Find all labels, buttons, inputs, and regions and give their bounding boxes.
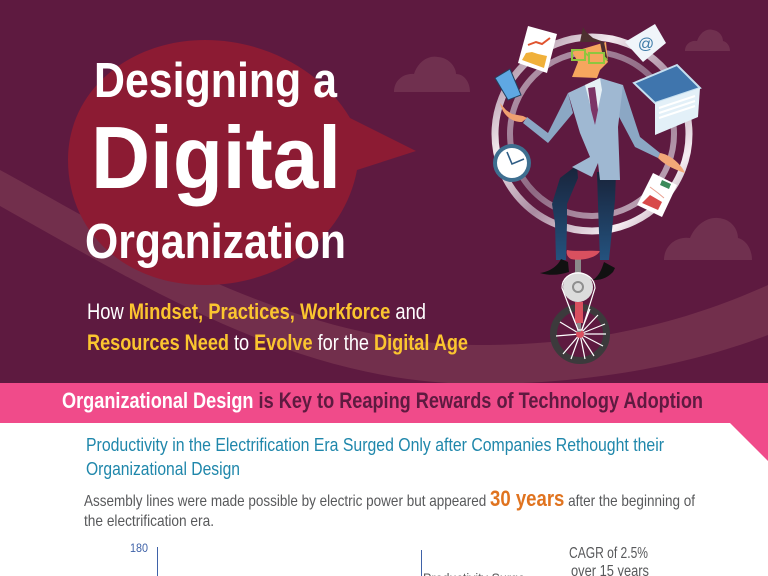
- cloud left: [394, 57, 470, 92]
- icon: clock: [493, 144, 531, 182]
- legs and shoes: [540, 165, 616, 280]
- cloud lower right: [664, 218, 752, 260]
- section heading: [86, 435, 664, 479]
- unicycle: [554, 250, 606, 360]
- callout: CAGR: [569, 545, 649, 576]
- icon: email envelope: [625, 24, 666, 62]
- cloud top right: [685, 30, 730, 51]
- icon: laptop: [634, 65, 700, 135]
- icon: chart document: [518, 26, 557, 73]
- arms and hands: [500, 85, 685, 173]
- body text: the electrification era.: [84, 513, 214, 530]
- callout: CAGR: CAGR of 2.5%: [569, 545, 648, 562]
- jacket: [568, 78, 623, 180]
- title: Digital: [91, 108, 341, 207]
- speech bubble: [68, 40, 416, 285]
- subtitle: Resources Need to Evolve for the Digital Age: [87, 330, 468, 355]
- swoosh band: [0, 170, 768, 384]
- icon: email envelope: @: [638, 36, 654, 53]
- chart axis: 180: [130, 541, 148, 555]
- hero background: [0, 0, 768, 384]
- illustration: juggler on unicycle: [493, 24, 700, 360]
- head and glasses: [572, 27, 608, 78]
- title: Organization: [85, 215, 346, 269]
- banner: [0, 383, 768, 461]
- body text: Assembly lines were made possible by electric power but appeared 30 years after the beginning of: [84, 486, 695, 511]
- title: [85, 54, 346, 269]
- section heading: Organizational Design: [86, 459, 240, 479]
- shirt and tie: [585, 78, 602, 125]
- subtitle: How Mindset, Practices, Workforce and: [87, 299, 426, 324]
- subtitle: [87, 299, 468, 355]
- section heading: Productivity in the Electrification Era Surged Only after Companies Rethought their: [86, 435, 664, 455]
- icon: report document: [637, 173, 677, 217]
- body text: [84, 486, 695, 530]
- folded ribbon corner: [730, 423, 768, 461]
- hoop: [495, 37, 689, 231]
- icon: phone: [495, 69, 521, 100]
- title: Designing a: [94, 54, 338, 108]
